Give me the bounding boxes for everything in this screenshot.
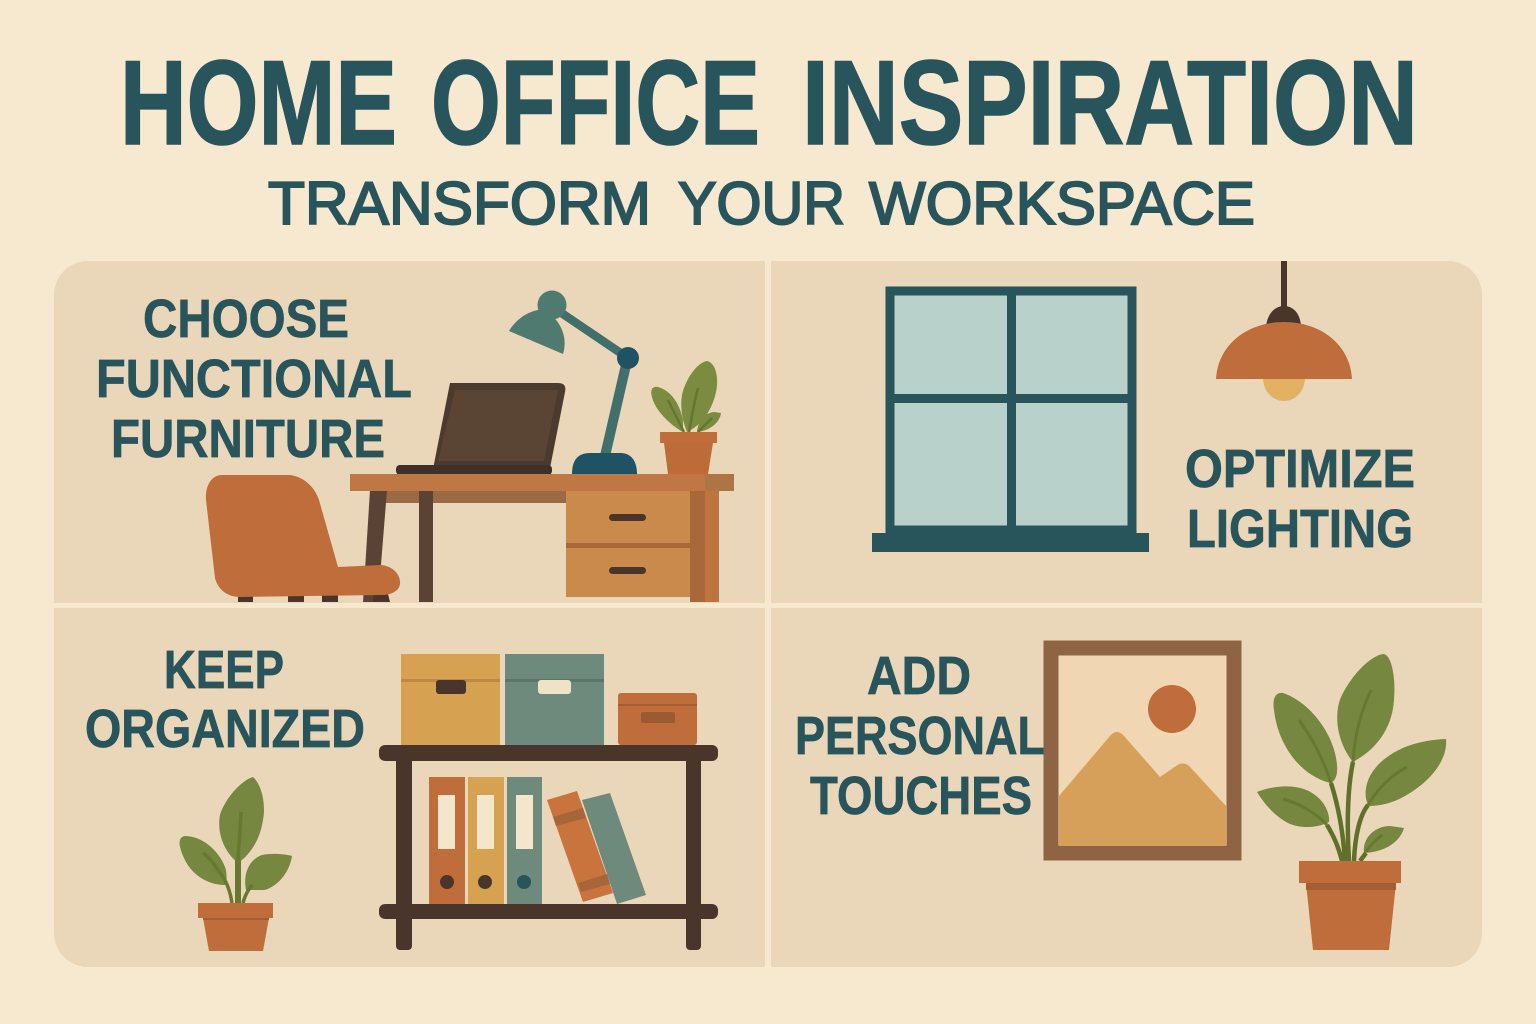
icon: potted plant on desk (651, 361, 721, 474)
icon: chair (206, 475, 400, 602)
heading: keep organized: ORGANIZED (85, 699, 365, 759)
heading: optimize lighting: LIGHTING (1187, 499, 1413, 559)
heading: optimize lighting (1185, 439, 1415, 559)
heading: choose functional furniture: FURNITURE (111, 409, 385, 469)
icon: laptop (396, 383, 565, 475)
icon: shelf (379, 745, 718, 950)
subtitle: TRANSFORM (268, 170, 651, 237)
panel grid background (54, 261, 1482, 967)
panel: add personal touches (795, 646, 1446, 950)
title: HOME (120, 36, 397, 170)
heading: add personal touches: PERSONAL (795, 706, 1045, 766)
heading: choose functional furniture: FUNCTIONAL (96, 349, 412, 409)
heading: keep organized: KEEP (164, 640, 284, 700)
icon: small potted plant (180, 777, 292, 951)
heading: add personal touches: TOUCHES (810, 766, 1032, 826)
panel: keep organized (85, 640, 718, 951)
heading: keep organized (85, 640, 365, 759)
title: OFFICE (431, 36, 760, 170)
icon: desk (350, 474, 734, 602)
title (120, 36, 1418, 170)
panel: optimize lighting (872, 261, 1415, 559)
icon: storage boxes (401, 654, 697, 745)
subtitle: WORKSPACE (869, 170, 1255, 237)
heading: choose functional furniture: CHOOSE (143, 289, 349, 349)
subtitle: YOUR (678, 170, 845, 237)
icon: large potted plant (1257, 654, 1446, 950)
subtitle (268, 170, 1255, 237)
heading: add personal touches: ADD (867, 646, 971, 706)
panel: choose functional furniture (96, 289, 734, 602)
icon: framed picture (1051, 648, 1234, 853)
heading: choose functional furniture (96, 289, 412, 469)
heading: optimize lighting: OPTIMIZE (1185, 439, 1415, 499)
icon: binders and books (429, 777, 646, 904)
icon: window (872, 291, 1149, 552)
heading: add personal touches (795, 646, 1045, 826)
icon: pendant lamp (1216, 261, 1352, 401)
icon: desk lamp (509, 290, 639, 474)
